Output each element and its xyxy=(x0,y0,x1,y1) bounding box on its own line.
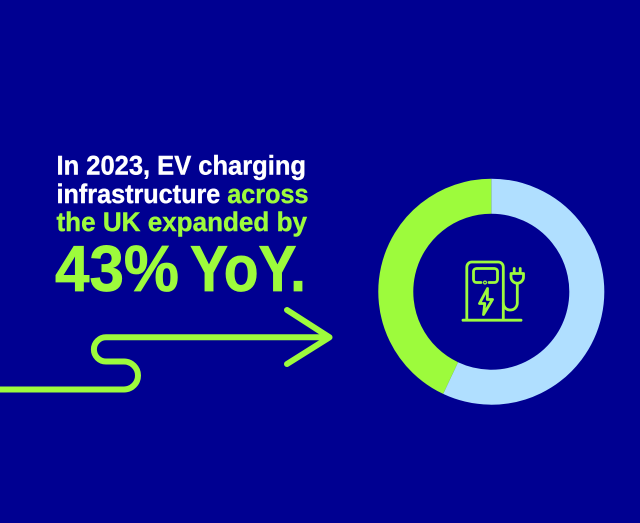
charger base xyxy=(463,319,521,322)
charger screen xyxy=(474,268,498,282)
headline line 2: infrastructure across xyxy=(56,179,308,209)
headline line 3: the UK expanded by xyxy=(56,207,307,237)
statistic number: 43% xyxy=(55,232,179,305)
lightning bolt xyxy=(480,288,492,314)
statistic unit: YoY. xyxy=(190,232,306,305)
cable xyxy=(503,284,517,310)
icon: EV charging station xyxy=(463,262,524,320)
plug xyxy=(511,268,524,283)
headline text block xyxy=(55,150,308,305)
donut segment: remainder (light blue) xyxy=(451,196,587,387)
screen dot xyxy=(484,282,486,283)
statistic: 43% YoY xyxy=(55,232,306,305)
donut chart: 43% share xyxy=(396,196,587,387)
headline line 1: In 2023, EV charging xyxy=(56,150,306,180)
arrow: winding line pointing to chart xyxy=(0,310,330,390)
charger body xyxy=(467,262,503,320)
donut segment: 43% (green) xyxy=(396,196,491,378)
